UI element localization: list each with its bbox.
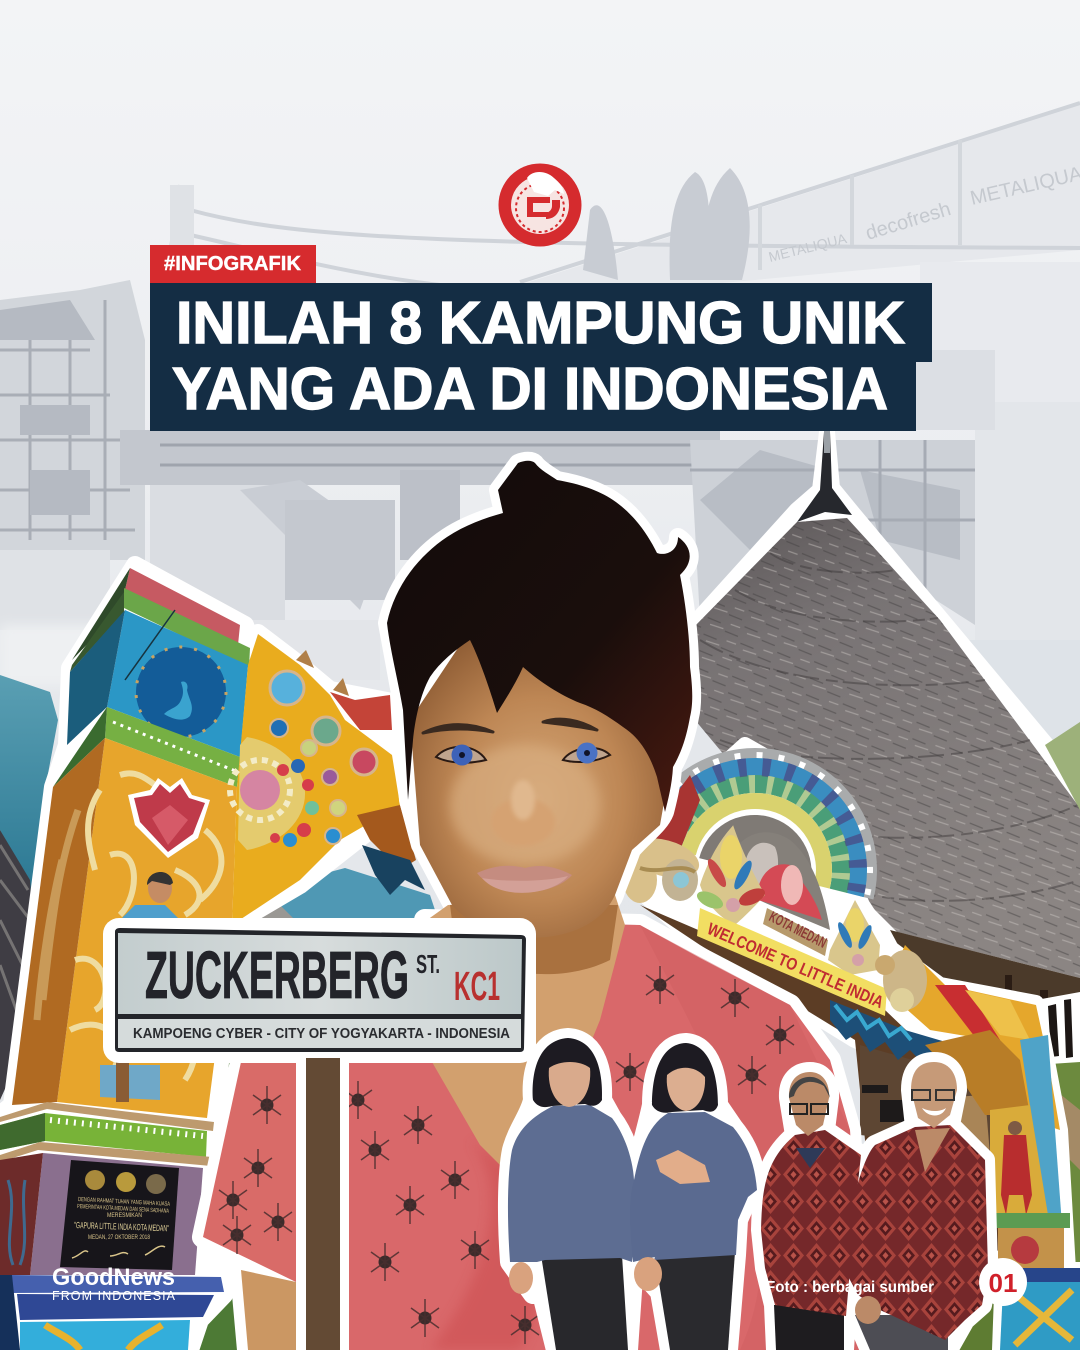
face [667,1068,705,1111]
sign suffix: ST. [416,949,440,979]
head white outline [387,461,692,930]
upper ledge [0,1102,214,1131]
lower ledge [0,1142,212,1166]
commemorative plaque: PEMERINTAH KOTA MEDAN DAN SENA SADHANA [77,1204,169,1215]
head [789,1072,829,1136]
shirt sleeve left [203,1062,296,1282]
pants [855,1315,948,1350]
hut eaves and posts [890,930,1080,1060]
hand [855,1296,881,1324]
glasses [912,1090,954,1100]
goodnews logo: FROM INDONESIA [52,1289,176,1303]
batik shirt [761,1130,861,1316]
little india gate arch right [623,731,1080,1350]
zigzag fringe [830,1000,990,1075]
blue peacock panel [67,610,248,757]
grass slopes [192,722,1080,1350]
glasses [790,1104,828,1114]
sweater [508,1105,634,1262]
faded bridge railing and billboards [170,103,1080,290]
sign white backing [103,918,536,1063]
kota medan sign: KOTA MEDAN [766,908,829,952]
welcome banner: WELCOME TO LITTLE INDIA [704,919,886,1012]
arm left [241,1270,296,1350]
title line two: YANG ADA DI INDONESIA [172,356,888,422]
painted man [122,872,178,918]
small footer credit: Foto : berbagai sumber [766,1279,934,1296]
hashtag tag [150,245,316,283]
tower green band upper [124,588,250,668]
blue pedestal [8,1275,224,1293]
title block [150,283,932,431]
eyebrows [423,719,597,733]
brown underside [357,805,416,870]
commemorative plaque: MERESMIKAN [107,1213,142,1219]
commemorative plaque: MEDAN, 27 OKTOBER 2018 [88,1235,151,1241]
right eye [563,742,610,764]
sign name: ZUCKERBERG [145,938,409,1013]
painted column bottom [100,1065,160,1100]
title line one: INILAH 8 KAMPUNG UNIK [176,290,905,356]
hashtag tag: #INFOGRAFIK [164,253,302,275]
girl two [630,1043,757,1350]
purple base [30,1153,203,1275]
undershirt [796,1148,825,1168]
sign code: KC1 [454,963,500,1009]
right blue base [1000,1268,1080,1350]
people white outlines [508,1038,988,1350]
misty horizon left [0,625,120,685]
floral scrolls [70,773,221,1080]
pants [541,1255,628,1350]
half-moon ornament [238,737,305,850]
right roof bands [875,945,1060,1130]
tower orange face [57,738,237,1118]
batik shirt [842,1125,988,1340]
white jagged strip right edge [1036,992,1080,1064]
hut white outline [690,432,1080,1000]
peacock [136,647,226,737]
pants [774,1305,844,1350]
teal mountain backdrop [0,675,440,1100]
shirt white outline [203,920,862,1350]
lotus on arch [758,864,822,920]
girl one [508,1038,634,1350]
gesturing hand [656,1150,710,1184]
red crest [330,692,392,730]
misty horizon right [960,640,1080,760]
goodnews logo: GoodNews [52,1264,175,1291]
hair [533,1038,602,1107]
right arch pillar [990,1035,1070,1268]
pants [654,1252,735,1350]
man one [761,1072,861,1350]
faded buildings right [690,262,1080,705]
commemorative plaque [60,1160,179,1270]
kota medan sign [763,908,829,956]
hand [509,1262,533,1294]
lower hand [634,1257,662,1291]
page number [979,1258,1027,1306]
head [911,1062,957,1128]
girl with blue eyes [203,461,862,1350]
commemorative plaque: "GAPURA LITTLE INDIA KOTA MEDAN" [74,1220,169,1233]
arch underside [640,905,1005,1290]
shirt body [349,920,862,1350]
mouth [477,866,572,892]
hut with thatched roof [690,431,1080,1060]
sweater [630,1112,757,1262]
street sign zuckerberg [103,918,536,1350]
four people cut-out [508,1038,988,1350]
hair [652,1043,718,1113]
fan of coloured petals [643,731,894,900]
sign location: KAMPOENG CYBER - CITY OF YOGYAKARTA - INDONESIA [133,1026,510,1042]
sign post [296,1060,349,1350]
arch inner orange vault [925,1030,1030,1115]
green band lower [105,707,240,787]
nose [491,798,555,846]
commemorative plaque: DENGAN RAHMAT TUHAN YANG MAHA KUASA [78,1197,170,1208]
sign board [115,928,526,1052]
goodnews logo [52,1264,176,1303]
arch inner stone [725,832,830,930]
left gate tower with arch [0,565,425,1350]
neck and chest [349,895,625,1190]
man two [842,1062,988,1350]
page number: 01 [989,1268,1017,1298]
faded buildings left [0,280,145,630]
left eye [436,744,486,766]
smile [922,1108,946,1116]
thatch layer arcs [700,553,1080,901]
brand emblem [498,164,582,246]
yellow arch with jewels [230,634,425,925]
hut spire [797,432,852,522]
hair [387,461,692,812]
swirl ornament left [623,831,703,903]
arch white outline [628,745,1080,1350]
decorated green band [0,1113,207,1157]
hut roof thatch [693,518,1080,978]
face [549,1062,590,1107]
neck v [915,1128,950,1172]
red backing behind fan [640,775,700,870]
faded central bridge and stairs [120,430,720,680]
gate white outline [0,565,402,1350]
skull pattern on shirt [219,966,794,1344]
faded bridge railing and billboards: METALIQUA [767,230,849,265]
jewel flower right [828,900,880,975]
face [410,630,668,938]
lotus [128,778,210,858]
tower pink crown [125,568,240,645]
jewels [270,671,304,705]
jewel flower left [694,825,768,925]
welcome banner [697,908,887,1016]
faded bridge railing and billboards: decofresh [863,198,953,245]
